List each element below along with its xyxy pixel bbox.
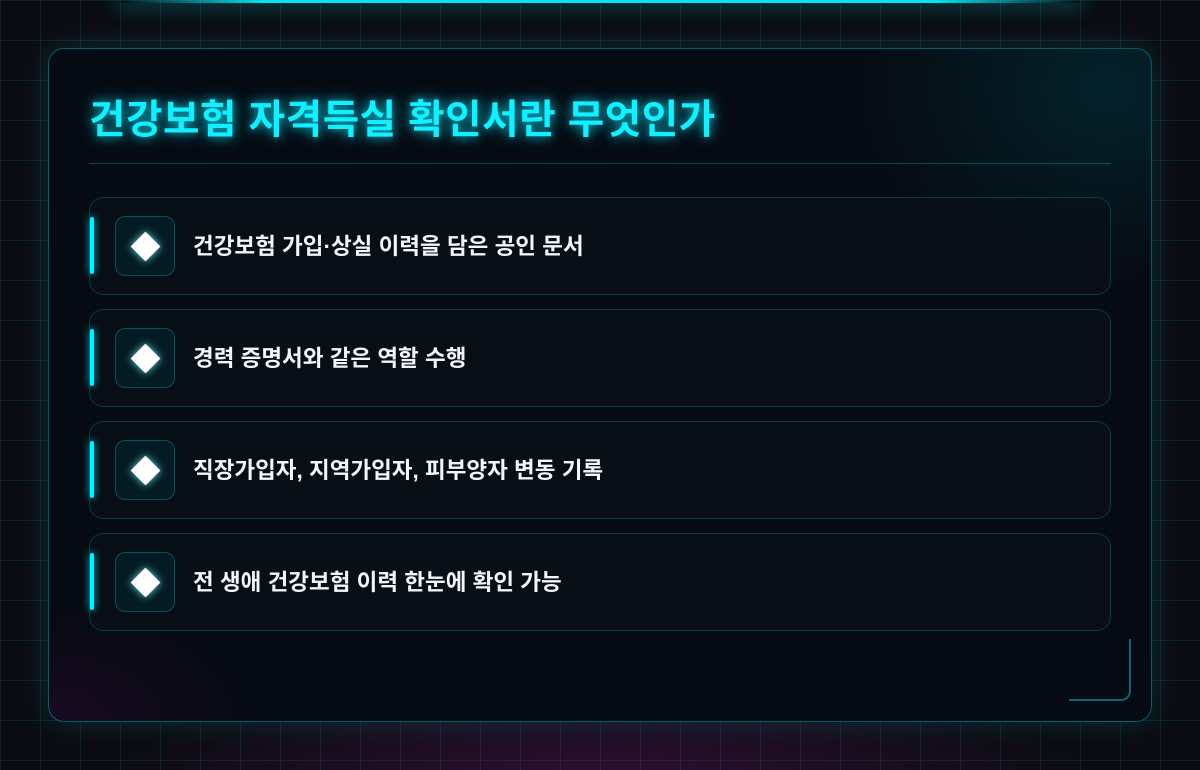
text: item 3: 직장가입자, 지역가입자, 피부양자 변동 기록 <box>193 458 603 483</box>
item 1 <box>89 197 1111 295</box>
text: item 2: 경력 증명서와 같은 역할 수행 <box>193 346 466 371</box>
icon: diamond <box>115 216 175 276</box>
corner decoration <box>1069 639 1131 701</box>
icon: diamond <box>115 328 175 388</box>
icon: diamond <box>115 552 175 612</box>
icon: diamond <box>115 440 175 500</box>
title: 건강보험 자격득실 확인서란 무엇인가 <box>89 98 716 142</box>
item 2 <box>89 309 1111 407</box>
text: item 4: 전 생애 건강보험 이력 한눈에 확인 가능 <box>193 570 562 595</box>
text: item 1: 건강보험 가입·상실 이력을 담은 공인 문서 <box>193 234 584 259</box>
item 3 <box>89 421 1111 519</box>
item 4 <box>89 533 1111 631</box>
